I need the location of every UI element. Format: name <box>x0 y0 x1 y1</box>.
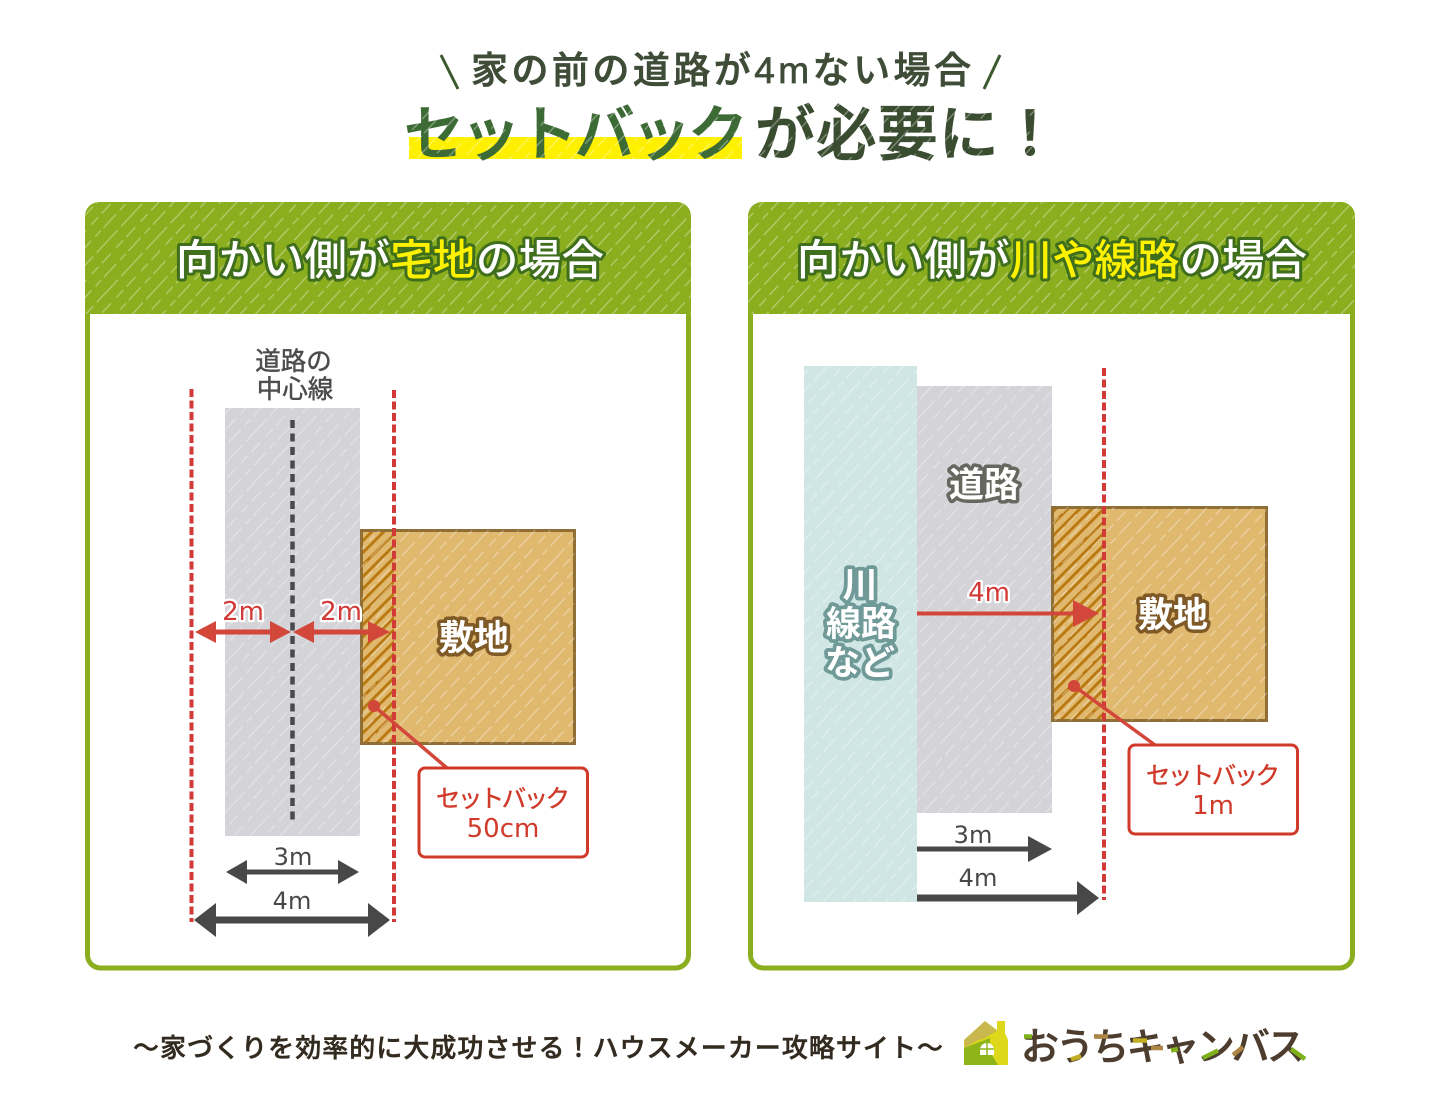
label: 3m: 3m <box>274 843 312 871</box>
callout: setback 1m: セットバック <box>1146 763 1280 790</box>
panel heading: 向かい側が宅地の場合 <box>176 238 604 285</box>
callout: setback 1m: 1m <box>1192 791 1234 821</box>
arrow: 4m road width <box>917 600 1099 627</box>
label: 4m: 4m <box>273 887 311 915</box>
panel frame <box>750 204 1352 968</box>
callout: setback 50cm: 50cm <box>467 814 539 844</box>
footer tagline: ～家づくりを効率的に大成功させる！ハウスメーカー攻略サイト～ <box>133 1033 943 1063</box>
callout: setback 50cm <box>419 768 588 857</box>
title: main heading: が必要に！ <box>755 101 1060 168</box>
title: main heading <box>400 100 1060 168</box>
river label <box>825 566 896 683</box>
title: lead line: 家の前の道路が4mない場合 <box>471 50 971 91</box>
arrow: 4m width <box>917 881 1099 915</box>
arrow: 3m width <box>226 860 359 884</box>
icon: house <box>964 1021 1008 1065</box>
site label: 敷地 <box>439 619 509 658</box>
arrow: 2m left and right <box>195 621 390 643</box>
site <box>1052 508 1266 720</box>
label: 2m: 2m <box>320 597 362 627</box>
road centre line <box>290 420 295 821</box>
panel frame <box>88 204 688 968</box>
logo wordmark: おうちキャンバス <box>1021 1027 1305 1069</box>
panel: opposite side is residential land <box>85 202 691 968</box>
callout: setback 1m <box>1129 745 1298 834</box>
road <box>917 386 1052 813</box>
centre line label: 道路の <box>255 348 332 376</box>
label: 4m red: 4m <box>968 578 1010 608</box>
arrow: 3m width <box>917 836 1052 862</box>
site label: 敷地 <box>1138 596 1208 635</box>
river label: など <box>825 644 895 683</box>
title: main heading: セットバック <box>404 101 748 168</box>
label: 2m <box>222 597 362 627</box>
label: 3m: 3m <box>954 821 992 849</box>
label: 2m: 2m <box>222 597 264 627</box>
arrow: 4m width <box>194 903 390 937</box>
panel heading: 向かい側が川や線路の場合 <box>797 238 1307 285</box>
river or railway strip <box>804 366 917 902</box>
setback boundary lines <box>192 389 394 922</box>
site <box>362 530 574 744</box>
centre line label <box>255 348 333 404</box>
callout leader <box>1068 680 1155 745</box>
centre line label: 中心線 <box>257 376 333 404</box>
logo <box>964 1021 1305 1069</box>
river label: 線路 <box>826 605 896 644</box>
callout leader <box>368 700 447 768</box>
road label: 道路 <box>949 466 1019 505</box>
panel header band <box>85 202 691 314</box>
label: 4m: 4m <box>959 864 997 892</box>
river label: 川 <box>842 566 878 605</box>
panel: opposite side is river or railway <box>748 202 1355 968</box>
road <box>225 408 360 836</box>
panel header band <box>748 202 1355 314</box>
callout: setback 50cm: セットバック <box>436 786 570 813</box>
setback boundary line <box>1102 368 1106 900</box>
